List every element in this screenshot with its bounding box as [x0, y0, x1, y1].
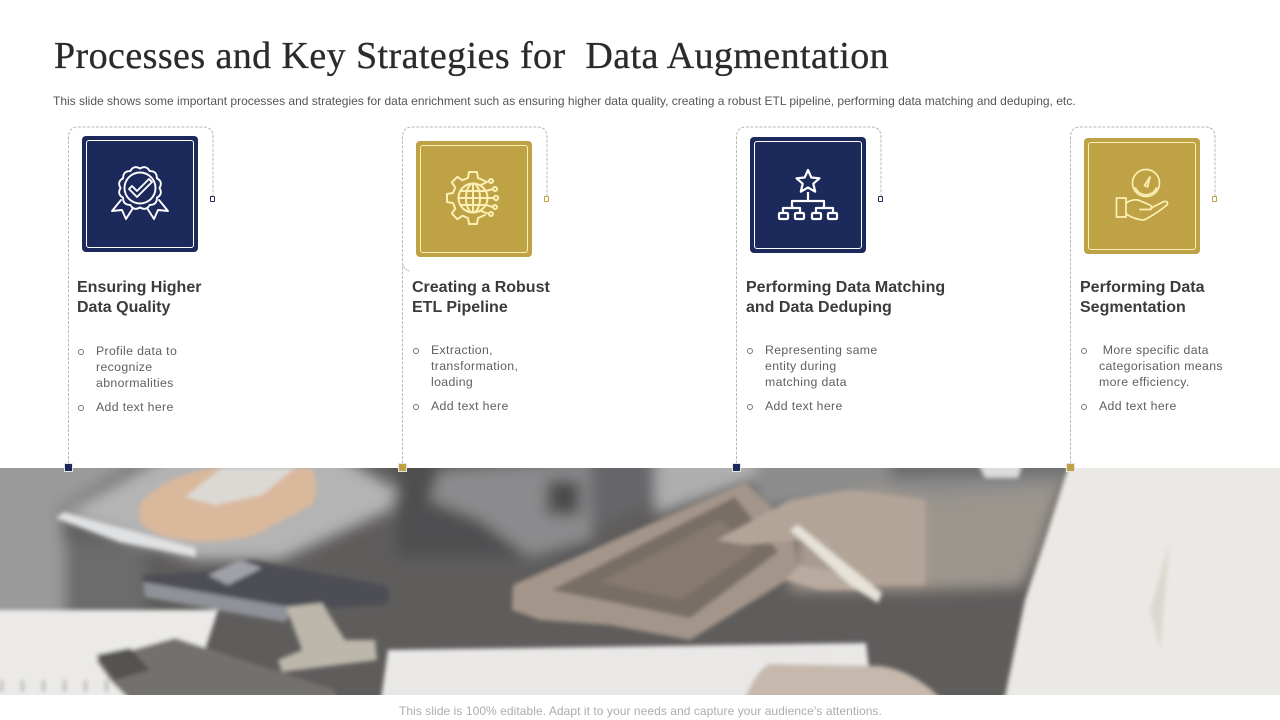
dashed connector frame	[68, 126, 214, 463]
dashed connector frame	[736, 126, 882, 463]
orange case	[139, 468, 316, 542]
heading: Ensuring Higher	[77, 279, 201, 296]
hand	[717, 490, 925, 585]
connector square	[1066, 463, 1075, 472]
connector dot	[210, 196, 215, 202]
column 4: segmentation: categorisation means	[1099, 359, 1223, 373]
heading	[412, 279, 550, 316]
column 2: ETL pipeline: loading	[431, 375, 473, 389]
bullets	[78, 349, 84, 355]
bullets	[1081, 348, 1087, 354]
column 3: matching and deduping: matching data	[765, 375, 847, 389]
column 3: matching and deduping	[732, 126, 945, 472]
heading: Creating a Robust	[412, 279, 550, 296]
heading: and Data Deduping	[746, 298, 892, 316]
connector dot	[544, 196, 549, 202]
column 1: data quality: recognize	[96, 360, 152, 374]
connector square	[64, 463, 73, 472]
connector square	[398, 463, 407, 472]
clip	[278, 603, 377, 672]
connector square	[732, 463, 741, 472]
phone	[96, 638, 340, 720]
icon tile: hand and gauge	[1084, 138, 1200, 254]
heading: Data Quality	[77, 298, 170, 316]
notebook spiral	[0, 680, 128, 692]
bullets	[413, 348, 419, 354]
icon tile: star hierarchy	[750, 137, 866, 253]
heading: Performing Data	[1080, 279, 1204, 296]
column 2: ETL pipeline: transformation,	[431, 359, 518, 373]
column 2: ETL pipeline	[398, 126, 550, 472]
heading	[77, 279, 202, 316]
footer note: This slide is 100% editable. Adapt it to your needs and capture your audience’s attentions.	[399, 704, 882, 718]
bullets	[747, 348, 753, 354]
pen in hand	[790, 525, 882, 603]
background photo: desk scene	[0, 468, 1280, 695]
heading: Segmentation	[1080, 298, 1186, 316]
connector dot	[878, 196, 883, 202]
heading: Performing Data Matching	[746, 279, 945, 296]
notebook	[0, 610, 218, 720]
heading	[746, 279, 945, 316]
dashed connector frame	[1070, 126, 1216, 463]
column 4: segmentation: more efficiency.	[1099, 375, 1190, 389]
connector dot	[1212, 196, 1217, 202]
heading: ETL Pipeline	[412, 298, 508, 316]
white pen	[56, 512, 196, 557]
sweater	[998, 440, 1280, 720]
heading	[1080, 279, 1205, 316]
column 3: matching and deduping: Representing same	[765, 343, 878, 357]
paper right	[378, 643, 875, 720]
icon tile: award badge	[82, 136, 198, 252]
column 1: data quality: Profile data to	[96, 344, 177, 358]
column 1: data quality	[64, 126, 215, 472]
column 4: segmentation	[1066, 126, 1223, 472]
column 1: data quality: abnormalities	[96, 376, 174, 390]
keyboard	[512, 482, 800, 640]
column 2: ETL pipeline: Extraction,	[431, 343, 493, 357]
column 4: segmentation: Add text here	[1099, 399, 1177, 413]
intro text: This slide shows some important processes and strategies for data enrichment such as ensuring higher data quality, creating a robust ETL pipeline, performing data matching and deduping, etc.	[53, 94, 1076, 108]
column 3: matching and deduping: Add text here	[765, 399, 843, 413]
column 4: segmentation: More specific data	[1103, 343, 1209, 357]
dashed connector frame	[402, 126, 548, 463]
calculator	[143, 560, 390, 610]
column 3: matching and deduping: entity during	[765, 359, 837, 373]
column 1: data quality: Add text here	[96, 400, 174, 414]
lower hand	[736, 664, 958, 720]
title: Processes and Key Strategies for Data Augmentation	[54, 35, 889, 77]
icon tile: gear and globe	[416, 141, 532, 257]
column 2: ETL pipeline: Add text here	[431, 399, 509, 413]
